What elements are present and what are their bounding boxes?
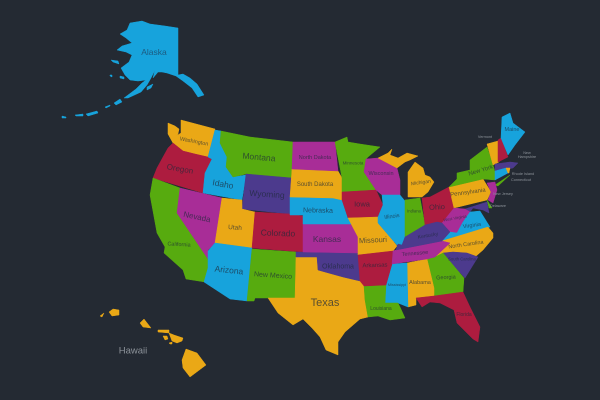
state: Virginia xyxy=(438,211,490,242)
state labels: Mississippi xyxy=(388,283,406,287)
state labels: California xyxy=(167,241,192,249)
state: Tennessee xyxy=(392,241,450,264)
state: Pennsylvania xyxy=(449,179,491,208)
state labels: Tennessee xyxy=(401,250,429,258)
state labels: Kentucky xyxy=(417,231,439,241)
state: Arizona xyxy=(204,243,252,301)
state labels: Michigan xyxy=(411,179,432,187)
state labels: Utah xyxy=(228,224,242,232)
state labels: South Dakota xyxy=(297,182,334,188)
state: Wisconsin xyxy=(364,158,400,195)
state labels: Florida xyxy=(456,312,472,318)
state: New Jersey xyxy=(487,182,497,203)
state labels: Montana xyxy=(242,151,276,163)
state: Ohio xyxy=(422,187,454,225)
state: Maine xyxy=(501,113,525,155)
state labels: Indiana xyxy=(407,208,422,214)
state: Michigan xyxy=(378,149,434,197)
state labels xyxy=(166,127,519,318)
state: Washington xyxy=(168,120,215,157)
state: New York Long Island xyxy=(495,175,510,186)
state labels: Arizona xyxy=(214,264,244,277)
state: Illinois xyxy=(378,195,405,245)
state labels: Nebraska xyxy=(303,207,333,215)
state labels: Nevada xyxy=(183,210,212,224)
small northeast state labels xyxy=(478,135,536,208)
state labels: Wyoming xyxy=(249,188,285,200)
state: Indiana xyxy=(405,198,425,237)
state labels: Iowa xyxy=(354,200,371,208)
label: Hawaii: Hawaii xyxy=(119,346,147,356)
state labels: Alabama xyxy=(409,280,432,286)
state labels: North Carolina xyxy=(448,239,485,250)
state labels: Georgia xyxy=(436,274,457,282)
state labels: Maine xyxy=(505,127,519,133)
state labels: Wisconsin xyxy=(368,171,394,177)
state labels: New York xyxy=(468,164,495,178)
small northeast state labels: Hampshire xyxy=(518,155,536,159)
state labels: Virginia xyxy=(463,222,482,230)
small northeast state labels: New xyxy=(523,151,531,155)
Hawaii islands xyxy=(100,309,206,377)
state labels: Pennsylvania xyxy=(450,187,487,198)
state: New Mexico xyxy=(247,249,296,301)
state: Idaho xyxy=(203,130,246,200)
state: Colorado xyxy=(252,212,303,252)
state labels: Louisiana xyxy=(370,306,392,312)
small northeast state labels: New Jersey xyxy=(493,192,513,196)
small northeast state labels: Delaware xyxy=(490,204,506,208)
state: Oregon xyxy=(153,143,212,193)
state: New Hampshire xyxy=(498,138,508,162)
state labels: Missouri xyxy=(359,235,388,245)
state: Florida xyxy=(416,292,480,342)
state labels: Minnesota xyxy=(343,160,364,166)
state: Kansas xyxy=(303,224,358,253)
state: Oklahoma xyxy=(296,252,360,281)
state: Alabama xyxy=(407,259,434,307)
state labels: Idaho xyxy=(212,177,235,191)
state labels: New Mexico xyxy=(254,271,292,281)
state: Connecticut xyxy=(495,168,508,180)
state labels: South Carolina xyxy=(448,256,477,262)
state: Nevada xyxy=(177,188,222,259)
state: Kentucky xyxy=(396,222,450,250)
state: South Dakota xyxy=(290,169,342,200)
label: Alaska: Alaska xyxy=(141,47,167,57)
state: Massachusetts xyxy=(495,162,518,171)
state labels: Colorado xyxy=(261,227,296,239)
state labels: Arkansas xyxy=(362,263,388,269)
small northeast state labels: Rhode Island xyxy=(512,172,534,176)
state: Iowa xyxy=(342,190,383,218)
state: Montana xyxy=(220,131,293,178)
state labels: West Virginia xyxy=(443,213,468,222)
state: North Carolina xyxy=(435,227,493,257)
state labels: Oregon xyxy=(166,162,194,176)
state labels: Washington xyxy=(179,136,209,148)
state labels: Oklahoma xyxy=(322,264,354,270)
state: California xyxy=(150,178,208,282)
state: Texas xyxy=(268,257,368,355)
state: Utah xyxy=(215,198,255,248)
state: Missouri xyxy=(348,217,397,255)
small northeast state labels: Connecticut xyxy=(511,178,532,182)
state: Alaska xyxy=(62,21,204,118)
state: Vermont xyxy=(487,141,499,165)
state: North Dakota xyxy=(292,142,338,171)
state labels: Kansas xyxy=(313,234,341,244)
state: Georgia xyxy=(427,253,464,296)
small northeast state labels: Vermont xyxy=(478,135,493,139)
state labels: Illinois xyxy=(384,213,400,221)
state: Louisiana xyxy=(364,285,405,320)
state: Minnesota xyxy=(335,137,380,192)
state: West Virginia xyxy=(442,208,470,233)
state labels: Texas xyxy=(311,297,340,309)
state: Rhode Island xyxy=(506,168,510,173)
state: Nebraska xyxy=(290,197,351,224)
state: Delaware xyxy=(487,200,492,208)
state: Maryland xyxy=(465,202,489,213)
state: Mississippi xyxy=(385,263,408,307)
state labels: Ohio xyxy=(429,202,445,212)
state: Arkansas xyxy=(358,251,393,286)
state: Wyoming xyxy=(242,174,292,214)
state labels: North Dakota xyxy=(299,155,332,161)
state: New York xyxy=(449,147,495,187)
state: South Carolina xyxy=(443,252,478,278)
